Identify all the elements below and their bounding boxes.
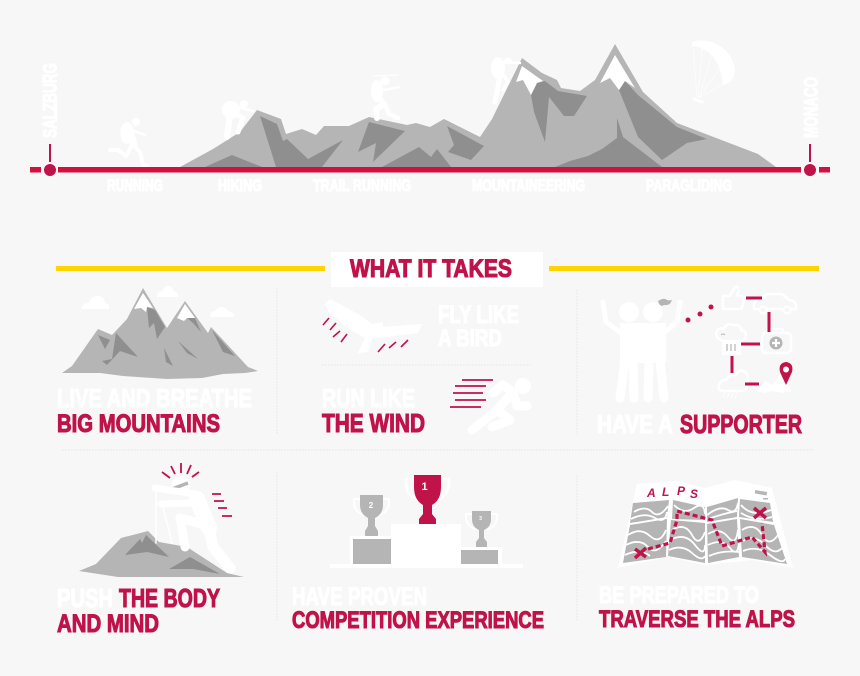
icon: chef hat bbox=[716, 324, 746, 355]
icon: first aid kit bbox=[762, 329, 791, 353]
end marker: Monaco: MONACO bbox=[802, 77, 822, 138]
map title: ALPS bbox=[646, 484, 698, 501]
icon: thumbs up bbox=[723, 287, 744, 309]
text: be prepared to traverse the alps: BE PREPARED TO bbox=[599, 582, 759, 609]
stage labels: RUNNING bbox=[107, 176, 163, 195]
text: push the body and mind: THE BODY bbox=[119, 583, 220, 613]
icon: paraglider silhouette bbox=[692, 40, 735, 102]
stage labels: PARAGLIDING bbox=[646, 176, 732, 195]
icon: silver trophy: 2 bbox=[369, 501, 374, 510]
icon: clouds bbox=[82, 286, 234, 317]
icon: hiker silhouette bbox=[222, 100, 253, 137]
route line bbox=[635, 508, 766, 558]
text: have proven competition experience bbox=[292, 583, 544, 634]
icon: bronze trophy bbox=[466, 511, 497, 547]
podium bbox=[330, 524, 523, 568]
text: have proven competition experience: HAVE PROVEN bbox=[292, 583, 427, 611]
text: be prepared to traverse the alps: TRAVERSE THE ALPS bbox=[599, 606, 795, 633]
map title: ALPS: A bbox=[646, 486, 656, 500]
icon: rain cloud bbox=[718, 371, 748, 398]
icon: bronze trophy: 3 bbox=[479, 516, 482, 522]
text: be prepared to traverse the alps bbox=[599, 582, 795, 633]
text: fly like a bird: A BIRD bbox=[438, 325, 502, 352]
text: run like the wind: RUN LIKE bbox=[322, 383, 415, 413]
stage labels: MOUNTAINEERING bbox=[472, 176, 585, 195]
support chain links bbox=[732, 298, 769, 384]
icon: two people bbox=[603, 299, 680, 398]
map title: ALPS: S bbox=[690, 487, 698, 501]
text: push the body and mind bbox=[57, 583, 220, 638]
map title: ALPS: L bbox=[662, 485, 669, 499]
text: push the body and mind: PUSH bbox=[57, 583, 113, 613]
icon: gold trophy bbox=[406, 475, 449, 524]
icon: mountaineer silhouette bbox=[491, 57, 520, 102]
panel: competition experience bbox=[292, 475, 544, 634]
panel: fly like a bird, run like the wind bbox=[322, 299, 531, 438]
icon: climber with poles bbox=[155, 476, 230, 568]
icon: car bbox=[754, 294, 796, 314]
panel: big mountains bbox=[57, 286, 258, 438]
icon: map bbox=[618, 480, 793, 568]
icon: runner silhouette bbox=[110, 118, 147, 166]
panel: route timeline bbox=[30, 40, 830, 195]
dotted connector bbox=[686, 304, 714, 322]
icon: big mountains bbox=[62, 288, 258, 379]
mountain range bbox=[180, 44, 776, 167]
map title: ALPS: P bbox=[677, 484, 686, 498]
text: have a supporter: HAVE A bbox=[597, 409, 673, 439]
stage labels: HIKING bbox=[218, 176, 262, 195]
text: have a supporter: SUPPORTER bbox=[680, 409, 802, 439]
start marker: Salzburg bbox=[40, 63, 62, 176]
start marker: Salzburg: SALZBURG bbox=[40, 63, 62, 138]
panel: push the body and mind bbox=[57, 463, 244, 638]
text: live and breathe big mountains: LIVE AND BREATHE bbox=[57, 383, 252, 413]
text: have a supporter bbox=[597, 409, 802, 439]
panel: have a supporter bbox=[597, 287, 802, 439]
text: run like the wind bbox=[322, 383, 425, 438]
icon: silver trophy bbox=[354, 495, 389, 536]
icon: rock bbox=[79, 531, 244, 577]
panel: traverse the alps bbox=[599, 480, 795, 633]
icon: gold trophy: 1 bbox=[421, 481, 428, 493]
text: fly like a bird: FLY LIKE bbox=[438, 301, 519, 329]
icon: map and location pin bbox=[757, 362, 792, 393]
stage labels bbox=[107, 176, 732, 195]
icon: trail runner silhouette bbox=[371, 75, 399, 118]
heading: what it takes: WHAT IT TAKES bbox=[350, 255, 512, 283]
timeline bar bbox=[30, 167, 830, 172]
text: fly like a bird bbox=[438, 301, 519, 352]
text: push the body and mind: AND MIND bbox=[57, 610, 159, 638]
text: run like the wind: THE WIND bbox=[322, 408, 425, 438]
text: live and breathe big mountains bbox=[57, 383, 252, 438]
stage labels: TRAIL RUNNING bbox=[313, 176, 411, 195]
text: live and breathe big mountains: BIG MOUNTAINS bbox=[57, 410, 220, 438]
heading: what it takes bbox=[56, 252, 819, 287]
end marker: Monaco bbox=[802, 77, 822, 176]
text: have proven competition experience: COMPETITION EXPERIENCE bbox=[292, 607, 544, 634]
icon: sprinter bbox=[450, 378, 531, 430]
effort rays bbox=[162, 463, 232, 516]
icon: bird bbox=[323, 299, 422, 353]
